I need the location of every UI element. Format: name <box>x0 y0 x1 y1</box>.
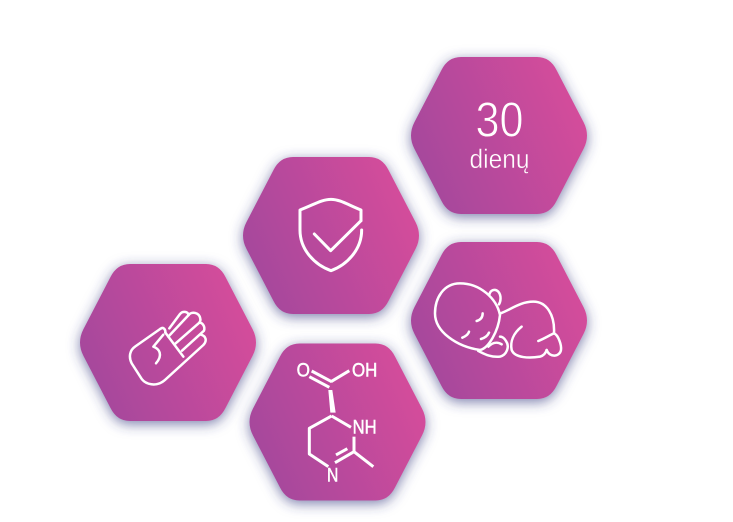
hexagon background: shield <box>243 157 419 314</box>
icon: sleeping baby <box>435 283 561 358</box>
panel: 30 days hexagon <box>411 57 587 214</box>
panel: shield hexagon <box>243 157 419 314</box>
hexagon background: baby <box>411 242 587 399</box>
hexagon background: 30 days <box>411 57 587 214</box>
icon: shield with check mark <box>300 199 362 271</box>
icon: molecule structure: NH <box>353 417 377 438</box>
icon: open hand <box>130 312 206 384</box>
icon: molecule structure: O <box>297 361 310 382</box>
panel: hand hexagon <box>80 264 256 421</box>
panel: sleeping baby hexagon <box>411 242 587 399</box>
panel: molecule hexagon <box>250 344 426 500</box>
icon: molecule structure <box>297 361 377 487</box>
number: 30: 30 <box>476 94 524 148</box>
icon: molecule structure: N <box>327 466 338 487</box>
label: dienų: dienų <box>470 144 530 174</box>
hexagon background: molecule <box>250 344 426 500</box>
hexagon background: hand <box>80 264 256 421</box>
icon: molecule structure: OH <box>352 361 377 382</box>
